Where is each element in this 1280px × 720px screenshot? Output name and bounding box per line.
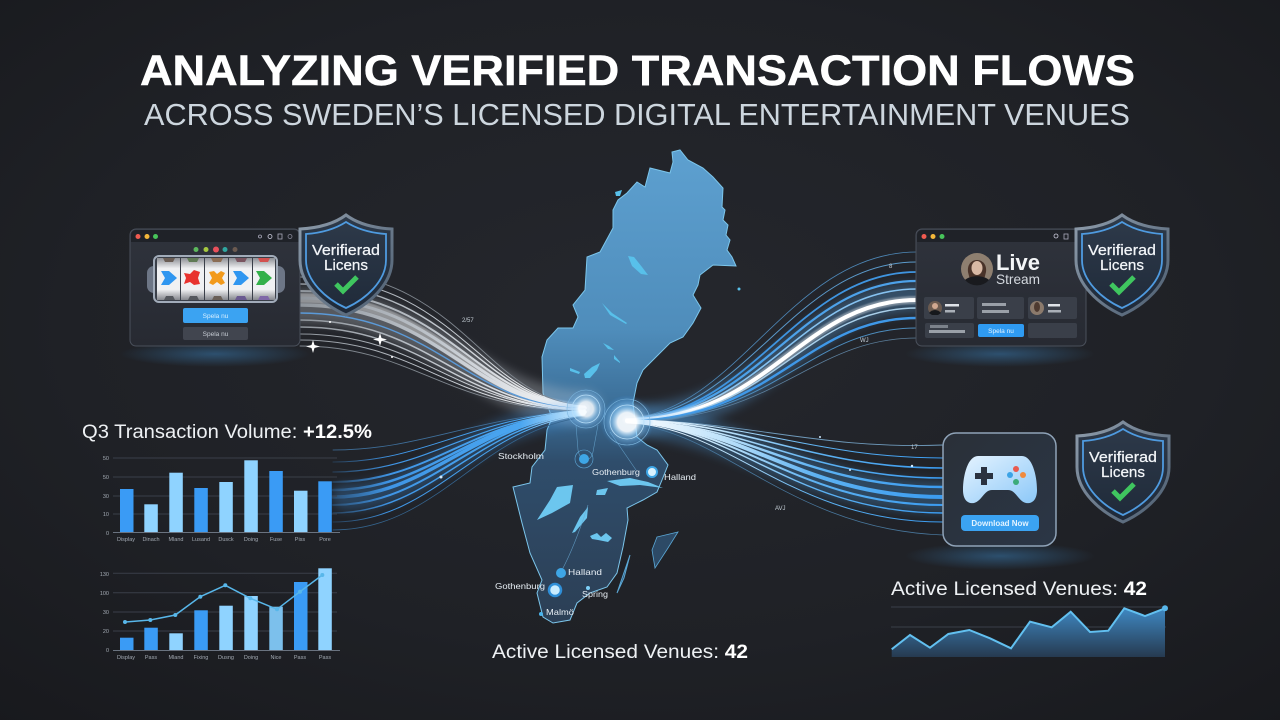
shield: game app: Verifierad xyxy=(1089,449,1157,466)
bar chart: upper: Fuse xyxy=(270,537,282,543)
window controls xyxy=(136,234,292,239)
stat: Q3 transaction volume: Q3 Transaction Volume: +12.5% xyxy=(82,422,372,443)
under-panel glows xyxy=(120,341,1095,570)
bar chart: upper: Dinach xyxy=(142,537,160,543)
map of Sweden xyxy=(513,150,740,623)
combo chart: lower xyxy=(100,568,340,661)
combo chart: lower: 20 xyxy=(103,629,109,635)
sparkles and small flow labels: 2/57 xyxy=(462,318,474,324)
combo chart: lower: Display xyxy=(117,655,135,661)
shield: live stream: Verifierad xyxy=(1088,242,1156,259)
bar chart: upper xyxy=(103,456,340,543)
flow lines: left upper xyxy=(300,270,585,411)
icon: gamepad xyxy=(963,456,1037,503)
area chart: venues trend xyxy=(891,605,1168,657)
panel: live stream window xyxy=(916,229,1086,346)
button: stream: Spela nu xyxy=(988,328,1014,335)
combo chart: lower: Mland xyxy=(169,655,183,661)
bar chart: upper: 30 xyxy=(103,494,109,500)
combo chart: lower: Pass xyxy=(145,655,157,661)
sparkles and small flow labels: WJ xyxy=(860,338,869,344)
combo chart: lower: Pass xyxy=(319,655,331,661)
panel: slot game window xyxy=(130,229,300,346)
shield: slot game xyxy=(300,215,392,315)
southern lakes xyxy=(537,478,663,542)
sparkles and small flow labels: 8 xyxy=(889,264,893,270)
bar chart: upper: 50 xyxy=(103,456,109,462)
combo chart: lower: Fixing xyxy=(194,655,208,661)
bar chart: upper: Mland xyxy=(169,537,183,543)
button: primary: Spela nu xyxy=(203,313,229,320)
bar chart: upper: 10 xyxy=(103,512,109,518)
shield: slot game: Verifierad xyxy=(312,242,380,259)
slot machine reels xyxy=(147,256,285,302)
flow lines: left lower xyxy=(333,410,585,530)
window controls xyxy=(922,234,1068,239)
shield: game app xyxy=(1077,422,1169,522)
hub: right xyxy=(600,395,654,449)
bar chart: upper: Lusand xyxy=(192,537,210,543)
city labels: Gothenburg xyxy=(592,467,640,477)
northern lakes xyxy=(570,190,740,378)
streamer avatar xyxy=(961,253,993,285)
combo chart: lower: Dusng xyxy=(218,655,234,661)
bar chart: upper: Dusck xyxy=(218,537,234,543)
hub: left xyxy=(565,388,607,430)
city labels xyxy=(495,451,696,617)
city labels: Gothenburg xyxy=(495,581,545,591)
bar chart: upper: 50 xyxy=(103,475,109,481)
bar chart: upper: 0 xyxy=(106,531,109,537)
subtitle: ACROSS SWEDEN’S LICENSED DIGITAL ENTERTAINMENT VENUES xyxy=(144,98,1130,132)
panel: game app card xyxy=(943,433,1056,546)
stream heading: Live xyxy=(996,250,1040,275)
shield: live stream: Licens xyxy=(1100,257,1144,274)
bar chart: upper: Pore xyxy=(319,537,331,543)
sparkles and small flow labels xyxy=(306,264,918,512)
sparkles and small flow labels: AVJ xyxy=(775,506,786,512)
stat: active venues centre: Active Licensed Venues: 42 xyxy=(492,642,748,663)
combo chart: lower: 0 xyxy=(106,648,109,654)
bar chart: upper: Display xyxy=(117,537,135,543)
combo chart: lower: Pass xyxy=(294,655,306,661)
stream cards xyxy=(924,297,1077,338)
shield: live stream xyxy=(1076,215,1168,315)
combo chart: lower: 130 xyxy=(100,572,109,578)
stat: active venues right: Active Licensed Venues: 42 xyxy=(891,579,1147,600)
combo chart: lower: 100 xyxy=(100,591,109,597)
bar chart: upper: Piss xyxy=(295,537,305,543)
city labels: Halland xyxy=(568,567,602,577)
combo chart: lower: Nice xyxy=(270,655,282,661)
shield: slot game: Licens xyxy=(324,257,368,274)
button: secondary xyxy=(183,327,248,340)
indicator lights xyxy=(194,246,238,252)
shield: game app: Licens xyxy=(1101,464,1145,481)
button: primary xyxy=(183,308,248,323)
panel: live stream window: Stream xyxy=(996,271,1040,287)
combo chart: lower: Doing xyxy=(244,655,258,661)
city labels: Spring xyxy=(582,589,608,599)
city labels: Malmö xyxy=(546,607,574,617)
trend line xyxy=(123,573,324,624)
combo chart: lower: 30 xyxy=(103,610,109,616)
flow lines: right lower xyxy=(627,420,943,535)
bar chart: upper: Doing xyxy=(244,537,258,543)
title: ANALYZING VERIFIED TRANSACTION FLOWS xyxy=(140,47,1135,95)
islands xyxy=(652,532,678,568)
map inner routes xyxy=(562,425,636,570)
sparkles and small flow labels: 17 xyxy=(911,445,918,451)
city labels: Stockholm xyxy=(498,451,544,461)
map pins xyxy=(539,450,657,616)
button: download: Download Now xyxy=(971,519,1029,528)
button: secondary: Spela nu xyxy=(203,331,229,338)
button: stream xyxy=(978,324,1024,337)
city labels: Halland xyxy=(664,472,696,482)
flow lines: right upper xyxy=(627,252,917,422)
